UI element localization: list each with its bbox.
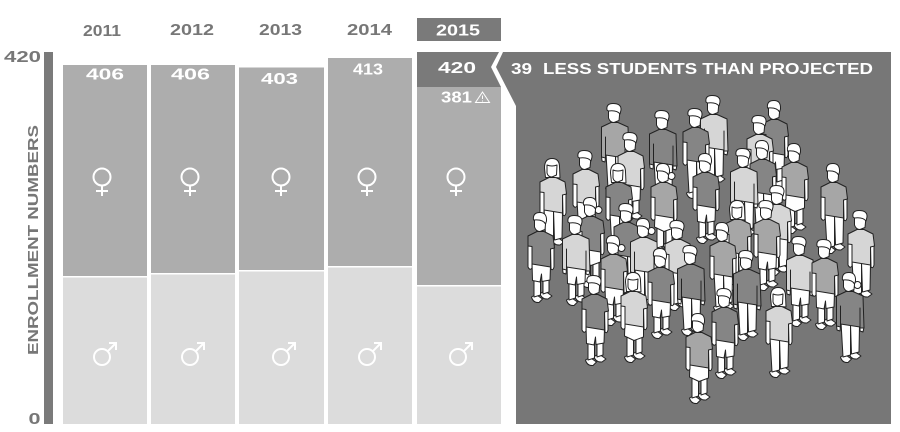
callout heading: 39 xyxy=(511,61,532,78)
year label 2013: 2013 xyxy=(259,22,302,39)
year label 2015 highlighted: 2015 xyxy=(436,22,480,40)
panel: missing students xyxy=(496,52,891,424)
bar 2015: 381 xyxy=(441,90,472,106)
callout heading: LESS STUDENTS THAN PROJECTED xyxy=(543,61,873,78)
y axis: 0 xyxy=(28,411,41,428)
bar 2014 xyxy=(328,58,412,424)
year label 2014: 2014 xyxy=(347,22,392,39)
year label 2011: 2011 xyxy=(83,23,121,40)
y axis: 420 xyxy=(4,49,41,66)
bar 2013 xyxy=(239,68,324,424)
axis title: ENROLLMENT NUMBERS xyxy=(25,125,42,355)
crowd of 39 students xyxy=(528,96,874,404)
year label 2015 highlighted xyxy=(417,18,501,41)
year label 2012: 2012 xyxy=(170,22,214,39)
bar 2011: 406 xyxy=(86,66,124,84)
projected 420 tab: 420 xyxy=(438,60,476,77)
bar 2012 xyxy=(151,65,235,424)
y axis xyxy=(4,49,53,428)
bar 2015 xyxy=(417,87,501,424)
bar 2012: 406 xyxy=(171,66,210,84)
bar 2011 xyxy=(63,65,147,424)
projected 420 tab xyxy=(417,52,501,87)
bar 2013: 403 xyxy=(261,71,298,88)
bar 2014: 413 xyxy=(353,62,383,78)
